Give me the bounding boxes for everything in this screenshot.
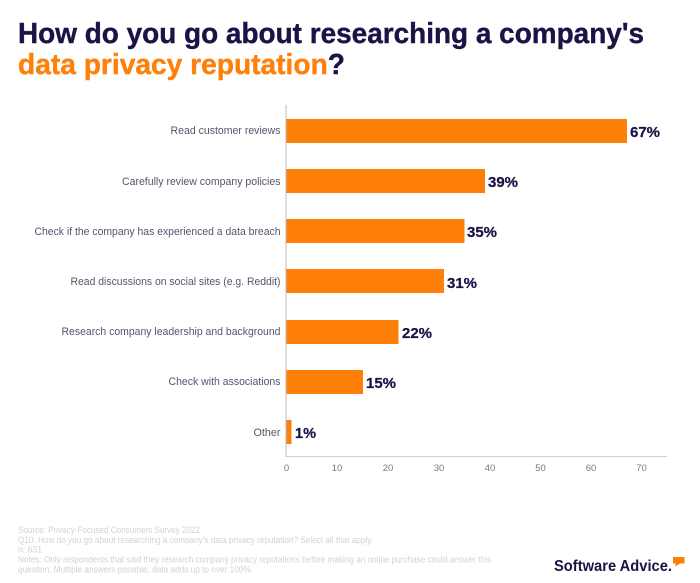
- x axis tick labels: 0: [284, 463, 289, 474]
- row: Check with associations: 15%: [366, 376, 396, 392]
- x axis tick labels: 70: [636, 463, 647, 474]
- row: Read customer reviews: Read customer reviews: [170, 125, 280, 137]
- row: Carefully review company policies: 39%: [488, 175, 518, 191]
- x axis tick labels: 60: [586, 463, 596, 474]
- row: Check if the company has experienced a data breach: Check if the company has experienced a data breach: [34, 226, 281, 238]
- row: Check with associations: [168, 370, 396, 394]
- source notes: Source: Privacy-Focused Consumers Survey 2022: [18, 525, 200, 535]
- row: Other: [254, 420, 316, 444]
- title: data privacy reputation?: [18, 49, 345, 81]
- row: Check if the company has experienced a data breach: 35%: [467, 225, 497, 241]
- row: Read customer reviews: 67%: [630, 125, 660, 141]
- source notes: n: 631: [18, 544, 42, 554]
- x axis tick labels: 10: [332, 463, 342, 474]
- row: Research company leadership and background: Research company leadership and background: [62, 326, 281, 338]
- row: Research company leadership and background: 22%: [402, 326, 432, 342]
- row: Read discussions on social sites: 31%: [447, 276, 477, 292]
- logo: Software Advice: Software Advice.: [554, 558, 672, 575]
- x axis tick labels: 30: [434, 463, 444, 474]
- row: Check if the company has experienced a data breach: [34, 219, 497, 243]
- source notes: Notes: Only respondents that said they research company privacy reputations before making an online purchase could answer this: [18, 554, 491, 564]
- icon: speech bubble: [673, 557, 684, 566]
- row: Read discussions on social sites: [70, 269, 477, 293]
- source notes: [18, 525, 491, 574]
- source notes: Q10: How do you go about researching a company's data privacy reputation? Select all that apply.: [18, 535, 373, 545]
- row: Carefully review company policies: [122, 169, 518, 193]
- row: Research company leadership and background: [62, 320, 432, 344]
- row: Carefully review company policies: Carefully review company policies: [122, 176, 280, 188]
- x axis tick labels: 50: [535, 463, 546, 474]
- x axis tick labels: [284, 463, 647, 474]
- x axis tick labels: 20: [383, 463, 393, 474]
- row: Read discussions on social sites: Read discussions on social sites (e.g. Reddit): [70, 276, 280, 288]
- source notes: question. Multiple answers possible, data adds up to over 100%.: [18, 564, 253, 574]
- title: [18, 18, 644, 81]
- title: How do you go about researching a company's: [18, 18, 644, 50]
- row: Read customer reviews: [170, 119, 660, 143]
- row: Other: 1%: [295, 426, 316, 442]
- row: Other: Other: [254, 427, 281, 439]
- row: Check with associations: Check with associations: [168, 376, 280, 388]
- bar chart: [34, 105, 667, 474]
- x axis tick labels: 40: [485, 463, 495, 474]
